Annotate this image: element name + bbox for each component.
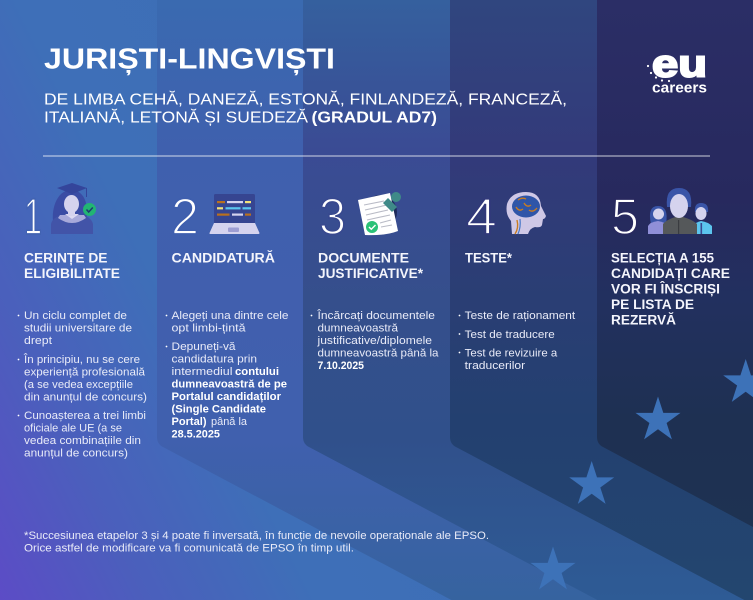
bullet list: (Single Candidate <box>172 404 266 416</box>
column 3: supporting documents <box>311 188 439 372</box>
bullet list: Încărcați documentele <box>316 309 435 322</box>
heading <box>611 250 730 328</box>
bullet list: În principiu, nu se cere <box>23 353 140 366</box>
column 1: eligibility <box>18 183 147 460</box>
footnote: Orice astfel de modificare va fi comunicată de EPSO în timp util. <box>24 542 354 554</box>
bullet list: 28.5.2025 <box>172 428 220 440</box>
subtitle: (GRADUL AD7) <box>312 110 437 126</box>
step number 4: 4 <box>466 188 497 245</box>
bullet list: 7.10.2025 <box>318 360 364 372</box>
bullet list <box>18 310 147 460</box>
bullet list: justificative/diplomele <box>316 335 432 347</box>
stars <box>530 359 753 589</box>
step number 2: 2 <box>171 188 199 245</box>
heading: CERINȚE DE <box>24 250 108 266</box>
icon: three candidates <box>648 188 712 234</box>
icon: head with brain <box>506 192 546 234</box>
title: JURIȘTI-LINGVIȘTI <box>44 44 335 76</box>
column 5: selection <box>611 188 730 328</box>
bullet list: studii universitare de <box>24 322 132 334</box>
bullet list: din anunțul de concurs) <box>24 392 147 404</box>
heading: DOCUMENTE <box>318 250 409 266</box>
bullet list: Test de traducere <box>465 329 555 341</box>
bullet list: Depuneți-vă <box>172 341 236 353</box>
bullet list: Test de revizuire a <box>465 348 558 360</box>
subtitle <box>44 92 567 126</box>
logo: EU careers <box>647 44 707 97</box>
bullet list: drept <box>24 335 52 347</box>
heading: JUSTIFICATIVE* <box>318 266 424 281</box>
bullet list: dumneavoastră <box>318 322 399 334</box>
step number 1: 1 <box>24 188 42 245</box>
bullet list: vedea combinațiile din <box>24 435 141 447</box>
panel: step 4 band <box>450 0 753 600</box>
footnote <box>24 530 489 554</box>
panel: step 5 band <box>597 0 753 527</box>
bullet list <box>311 309 439 372</box>
bullet list: Teste de raționament <box>465 310 575 322</box>
heading: SELECȚIA A 155 <box>611 250 714 266</box>
logo: EU careers: careers <box>652 81 707 97</box>
bullet list: anunțul de concurs) <box>24 448 128 460</box>
bullet list: Cunoașterea a trei limbi <box>24 410 146 422</box>
footnote: *Succesiunea etapelor 3 și 4 poate fi inversată, în funcție de nevoile operaționale ale EPSO. <box>24 530 489 542</box>
bullet list: traducerilor <box>465 360 526 372</box>
bullet list: opt limbi-țintă <box>172 322 246 334</box>
bullet list: experiență profesională <box>24 366 146 378</box>
heading: TESTE* <box>465 250 513 266</box>
heading: CANDIDAȚI CARE <box>611 266 730 281</box>
bullet list <box>166 310 288 440</box>
heading: ELIGIBILITATE <box>24 266 120 281</box>
bullet list: contului <box>235 366 279 378</box>
column 4: tests <box>459 188 575 372</box>
bullet list <box>459 310 575 372</box>
heading: REZERVĂ <box>611 312 676 328</box>
bullet list: dumneavoastră până la <box>318 348 439 360</box>
bullet list: Portal) <box>172 416 207 428</box>
logo: EU careers: eu <box>652 44 707 86</box>
bullet list: până la <box>211 416 248 428</box>
heading: CANDIDATURĂ <box>172 250 275 266</box>
heading <box>24 250 120 281</box>
bullet list: (a se vedea excepțiile <box>24 379 133 391</box>
icon: laptop <box>209 194 260 234</box>
icon: document with stamp <box>358 192 401 235</box>
step number 5: 5 <box>611 188 639 245</box>
heading: VOR FI ÎNSCRIȘI <box>611 282 720 296</box>
step number 3: 3 <box>319 188 346 245</box>
bullet list: oficiale ale UE (a se <box>24 422 122 434</box>
icon: graduate <box>51 183 96 234</box>
bullet list: dumneavoastră de pe <box>172 378 287 390</box>
bullet list: Alegeți una dintre cele <box>172 310 288 322</box>
bullet list: Un ciclu complet de <box>24 310 127 322</box>
column 2: application <box>166 188 288 440</box>
panel: step 3 band <box>303 0 753 600</box>
bullet list: intermediul <box>172 366 232 378</box>
bullet list: candidatura prin <box>172 354 257 366</box>
bullet list: Portalul candidaților <box>172 391 282 403</box>
heading: PE LISTA DE <box>611 297 694 312</box>
subtitle: ITALIANĂ, LETONĂ ȘI SUEDEZĂ <box>44 110 309 126</box>
panel: step 2 band <box>157 0 753 600</box>
heading <box>318 250 424 281</box>
subtitle: DE LIMBA CEHĂ, DANEZĂ, ESTONĂ, FINLANDEZĂ, FRANCEZĂ, <box>44 92 567 108</box>
